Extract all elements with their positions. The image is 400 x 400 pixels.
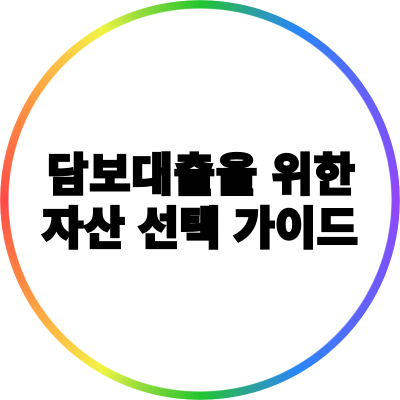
title line 1: 담보대출을 위한 <box>47 150 355 200</box>
title line 2: 자산 선택 가이드 <box>42 203 358 254</box>
